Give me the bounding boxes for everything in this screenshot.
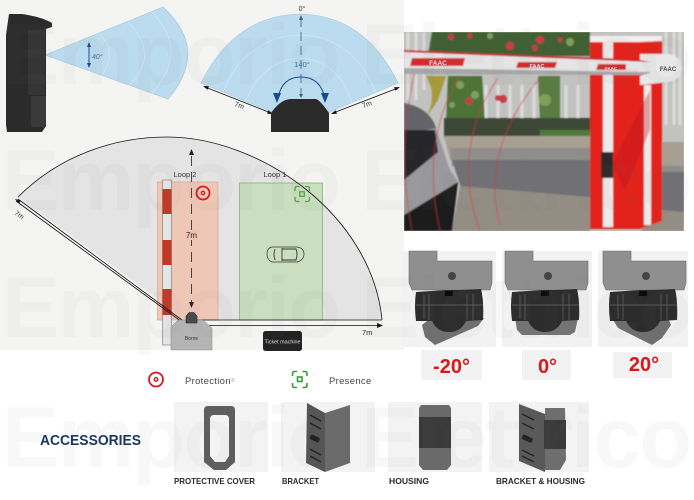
legend — [149, 372, 372, 388]
label: BRACKET & HOUSING — [496, 476, 585, 486]
legend label: protection: Protection — [185, 376, 231, 387]
icon: presence — [292, 372, 307, 388]
icon: protection target — [196, 186, 210, 200]
angle label: 20° — [629, 354, 659, 376]
icon: straight sensor — [505, 251, 588, 335]
label: 140 degrees: 140° — [294, 60, 310, 69]
arc arrow — [273, 77, 329, 103]
car front — [404, 103, 458, 231]
detection fan: horizontal 140 degrees — [201, 14, 398, 112]
barrier brand labels: FAAC — [605, 66, 618, 71]
detection fan: vertical 40 degrees — [45, 7, 188, 99]
left 7m dimension: 7m — [233, 101, 245, 111]
barrier brand labels: FAAC — [660, 67, 677, 73]
angle adjustment: 20 degrees — [598, 251, 688, 378]
label: 0 degrees: 0° — [299, 5, 306, 13]
label: loop 1: Loop 1 — [264, 170, 286, 179]
loop 1 zone — [240, 183, 322, 320]
left 7m dimension: 7m — [13, 210, 25, 221]
icon: housing — [419, 405, 451, 470]
icon: tilted sensor — [603, 251, 686, 345]
panel — [489, 402, 589, 472]
near pavement — [452, 186, 684, 231]
center axis arrow — [299, 15, 303, 98]
legend label: protection: ® — [231, 377, 235, 384]
far pavement — [444, 136, 684, 172]
barrier post — [590, 36, 662, 229]
icon: sensor on boom — [186, 312, 197, 323]
heading: accessories: ACCESSORIES — [40, 433, 141, 449]
road — [452, 160, 684, 212]
ground plan diagram — [13, 137, 383, 351]
arm pivot cap — [640, 54, 682, 85]
angle label: 0° — [538, 356, 557, 378]
top view sensor diagram — [201, 5, 400, 132]
angle adjustment: 0 degrees — [502, 251, 592, 380]
panel — [281, 402, 375, 472]
accessory: bracket and housing — [489, 402, 589, 486]
photo: FAAC barrier with sensor — [404, 32, 684, 231]
accessory: housing — [388, 402, 482, 486]
flowering bush — [426, 32, 590, 140]
label: loop 2: Loop 2 — [174, 170, 196, 179]
corrugated wall — [408, 32, 680, 125]
boom cabinet — [171, 320, 212, 350]
watermark: Emporio Elettrico — [2, 133, 692, 229]
angle label: -20° — [433, 356, 470, 378]
right 7m dimension — [190, 323, 383, 337]
barrier arm — [162, 180, 172, 345]
label: PROTECTIVE COVER — [174, 476, 255, 486]
icon: presence frame — [295, 186, 310, 202]
icon: sensor side profile — [6, 14, 52, 132]
accessory: protective cover — [174, 402, 268, 486]
watermark: Emporio Elettrico — [2, 390, 692, 486]
icon: protection — [149, 372, 163, 386]
icon: sensor top profile — [271, 99, 329, 132]
ticket machine: Ticket machine — [264, 340, 301, 346]
label: HOUSING — [389, 476, 429, 486]
watermark: Emporio Elettrico — [2, 7, 692, 103]
diagram background — [0, 0, 404, 350]
angle adjustment: -20 degrees — [402, 251, 496, 380]
panel — [388, 402, 482, 472]
ticket machine — [263, 331, 302, 351]
central 7m dimension: 7m — [186, 231, 197, 240]
photo backdrop — [404, 32, 684, 231]
barrier brand labels: FAAC — [429, 60, 447, 67]
icon: bracket with housing — [519, 404, 566, 472]
detection fan: vertical 40 degrees: 40° — [92, 53, 103, 61]
panel — [402, 251, 496, 347]
label: BRACKET — [282, 476, 319, 486]
left 7m dimension — [203, 86, 273, 114]
watermark: Emporio Elettrico — [2, 260, 692, 356]
accessory: bracket — [281, 402, 375, 486]
right 7m dimension: 7m — [362, 328, 372, 337]
right 7m dimension: 7m — [361, 100, 373, 110]
panel — [174, 402, 268, 472]
barrier brand labels — [429, 60, 677, 73]
side view sensor diagram — [6, 7, 188, 132]
icon: tilted sensor — [409, 251, 492, 345]
central 7m dimension — [185, 149, 198, 308]
legend label: presence: Presence — [329, 376, 372, 387]
icon: car — [267, 247, 304, 262]
panel — [598, 251, 688, 347]
right 7m dimension — [331, 87, 400, 114]
panel — [502, 251, 592, 347]
left 7m dimension — [13, 199, 188, 326]
detection sector — [18, 137, 382, 320]
loop 2 zone — [158, 182, 218, 320]
boom cabinet: Borne — [185, 336, 198, 342]
radar wave arcs — [405, 62, 540, 231]
barrier boom arm — [404, 50, 650, 75]
icon: cover — [204, 406, 235, 470]
kerb — [450, 148, 684, 174]
barrier brand labels: FAAC — [530, 64, 545, 70]
sector outline — [18, 137, 382, 320]
icon: bracket — [306, 403, 350, 472]
